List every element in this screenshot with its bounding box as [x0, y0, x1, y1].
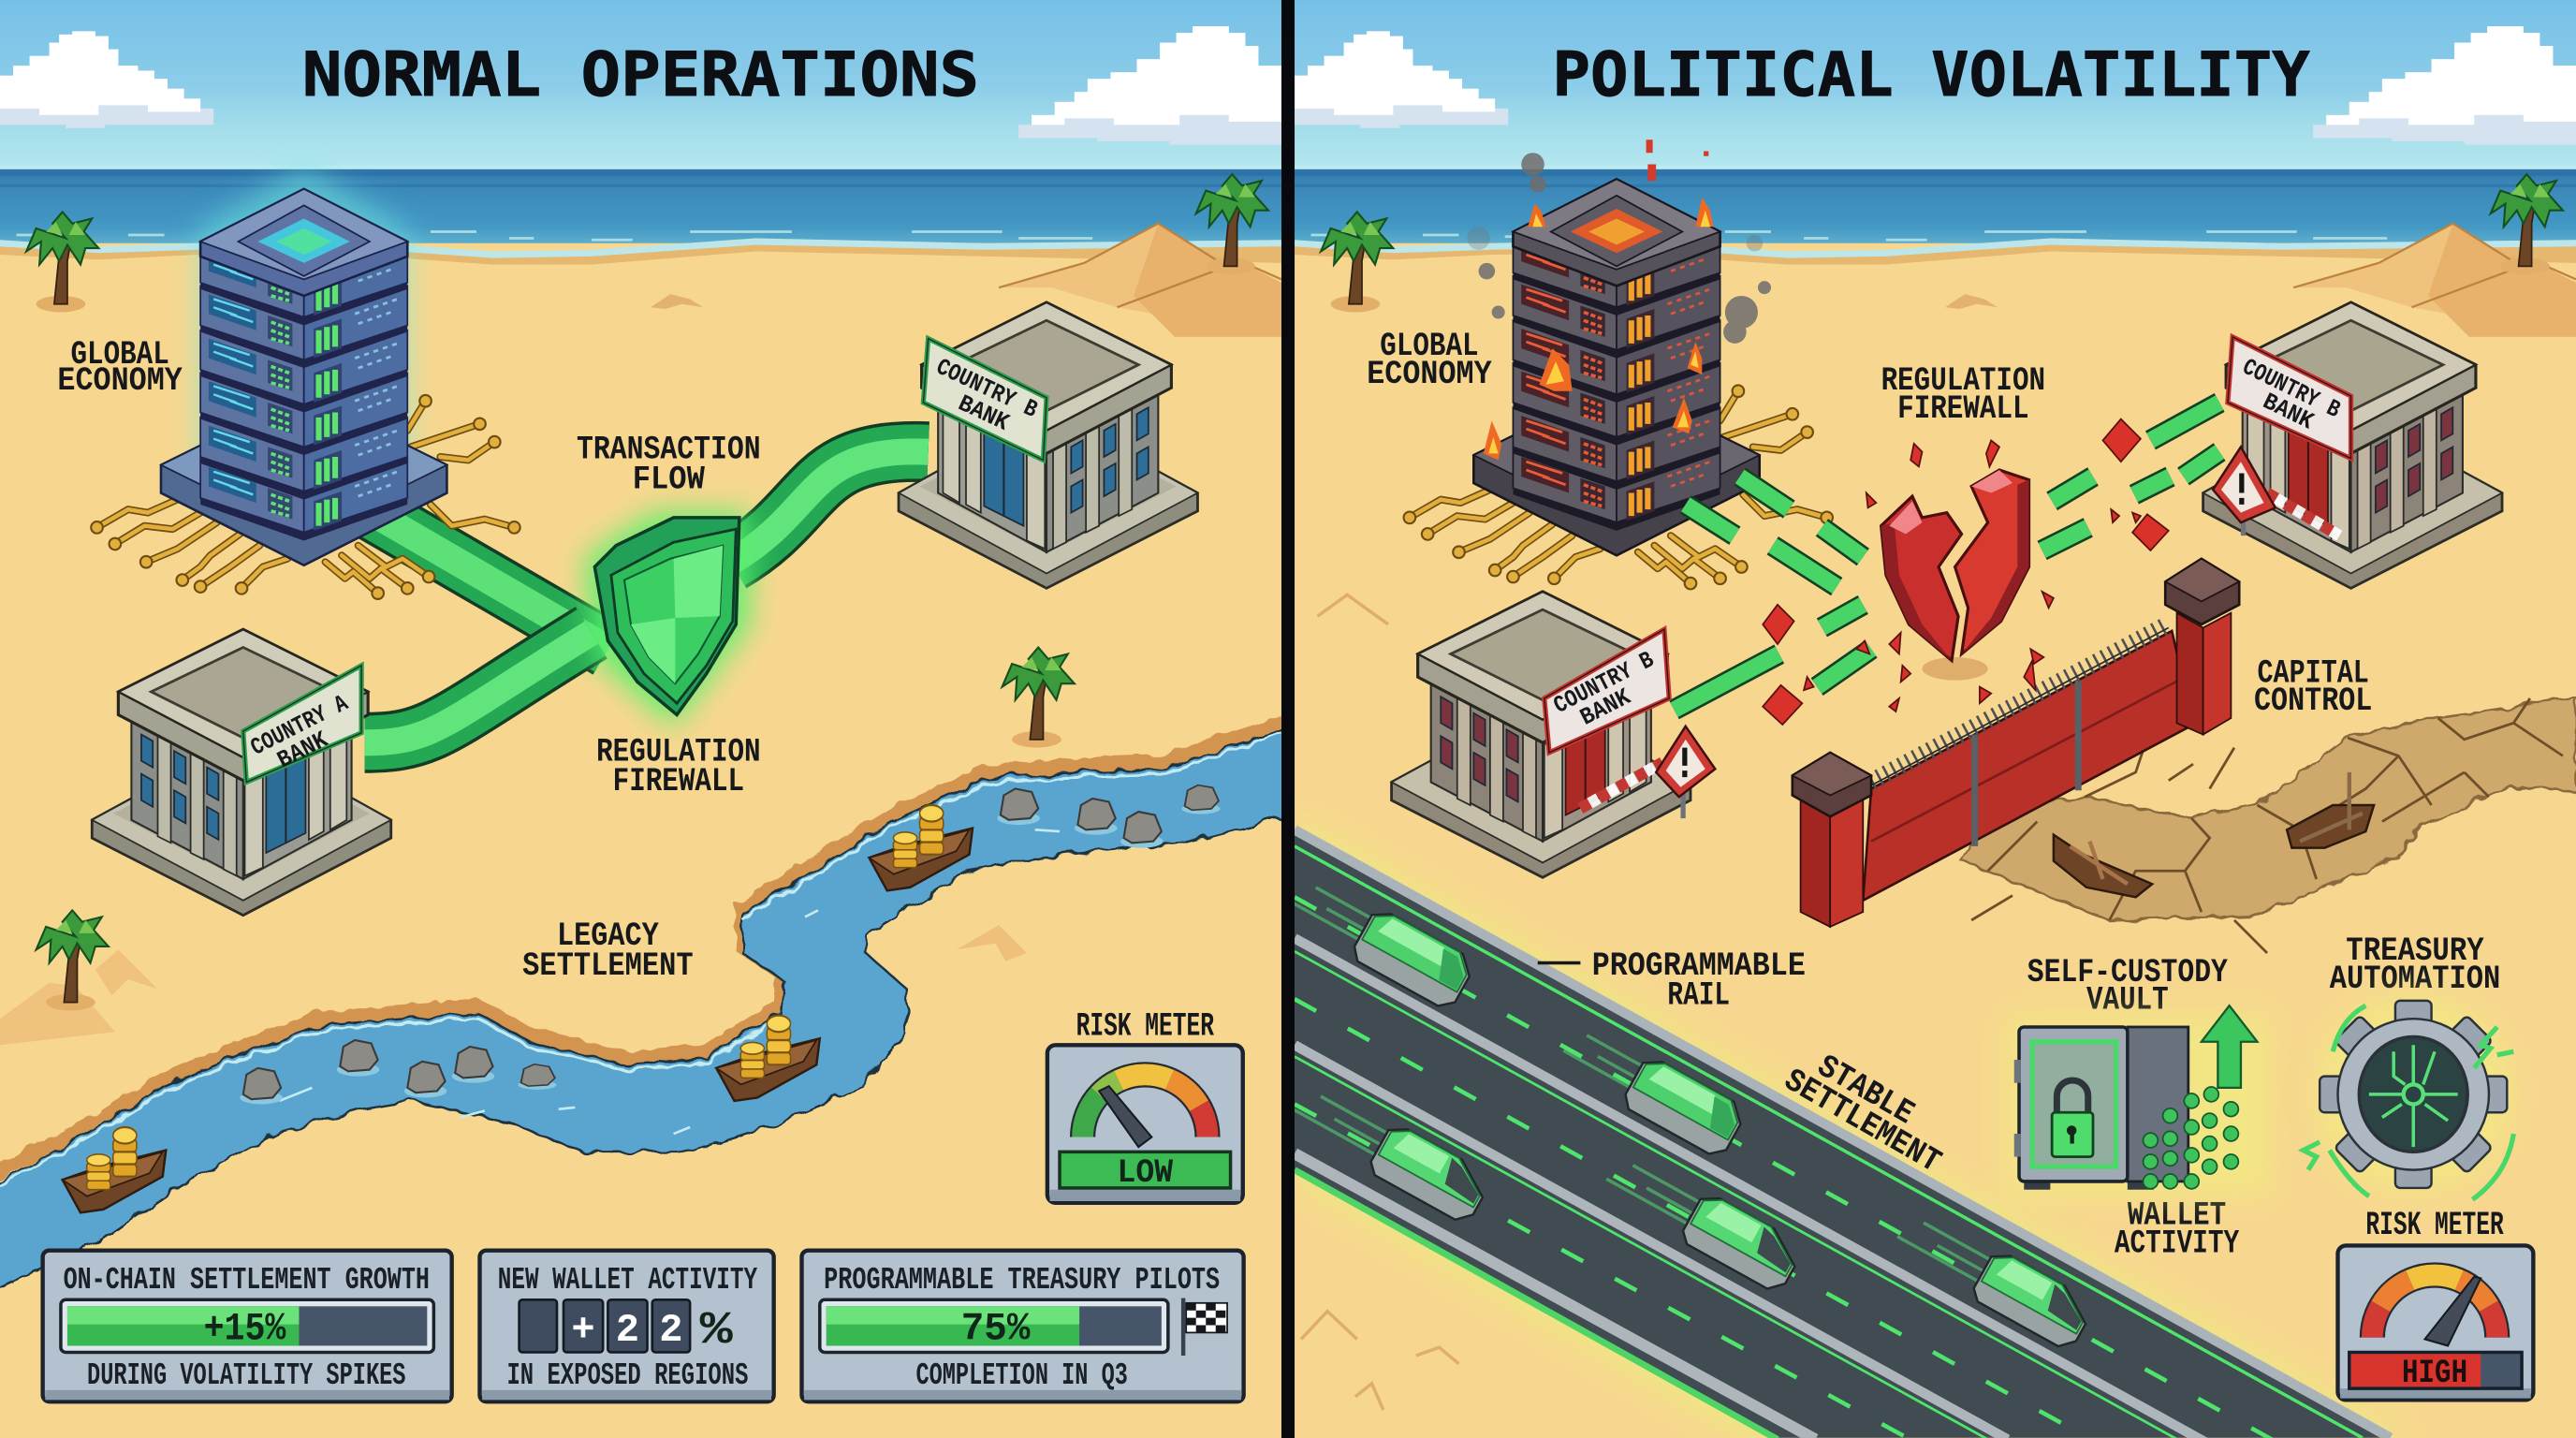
title: normal operations: NORMAL OPERATIONS [302, 40, 979, 110]
label: global economy: ECONOMY [1367, 356, 1492, 393]
label: regulation firewall [1881, 362, 2045, 428]
label: global economy: GLOBAL [1380, 328, 1479, 365]
icon: country a bank: BANK [273, 726, 333, 774]
label: regulation firewall [598, 738, 759, 790]
panel: political volatility [1282, 40, 2576, 1438]
icon: global economy server tower [91, 168, 520, 599]
panel divider [1281, 0, 1295, 1438]
broken transaction flow pipes [1674, 403, 2219, 710]
label: self-custody vault: VAULT [2086, 982, 2169, 1020]
label: programmable rail: PROGRAMMABLE [1592, 947, 1806, 985]
label: legacy settlement: SETTLEMENT [522, 947, 694, 985]
label: capital control [2254, 654, 2372, 720]
icon: country a bank [92, 629, 391, 916]
capital control wall [1793, 559, 2239, 927]
stat panel: programmable treasury pilots: 75% [961, 1306, 1031, 1351]
icon: country b bank, lower: BANK [1576, 683, 1635, 732]
icon: burning server tower [1404, 139, 1833, 589]
stat panel: on-chain settlement growth: ON-CHAIN SETTLEMENT GROWTH [64, 1263, 430, 1299]
label: regulation firewall: REGULATION [596, 734, 761, 771]
label: stable settlement: SETTLEMENT [1778, 1062, 1947, 1181]
label: regulation firewall: FIREWALL [613, 763, 744, 800]
label: programmable rail: RAIL [1667, 976, 1730, 1014]
stat panel: new wallet activity: IN EXPOSED REGIONS [506, 1358, 748, 1394]
warning sign and barrier [2213, 447, 2339, 536]
label: transaction flow: FLOW [633, 461, 706, 498]
label: global economy: ECONOMY [57, 362, 183, 400]
stat panel: new wallet activity: 2 [659, 1308, 683, 1353]
red shards [1763, 419, 2169, 725]
label: transaction flow [577, 436, 759, 489]
label: capital control: CAPITAL [2258, 654, 2369, 692]
icon: country a bank: COUNTRY A [246, 690, 353, 762]
label: programmable rail [1538, 947, 1806, 1014]
icon: country b bank, lower: COUNTRY B [1549, 646, 1659, 720]
title: political volatility: POLITICAL VOLATILITY [1553, 40, 2310, 110]
stat panel: new wallet activity: 2 [616, 1308, 639, 1353]
icon: country b bank, lower [1392, 592, 1715, 877]
risk meter: low: RISK METER [1076, 1008, 1215, 1046]
label: wallet activity: ACTIVITY [2115, 1225, 2239, 1262]
highway: programmable rail [1282, 816, 2415, 1438]
legacy settlement river with rocks and boats [0, 722, 1290, 1292]
label: transaction flow: TRANSACTION [577, 432, 761, 469]
icon: country b bank: BANK [954, 390, 1014, 437]
label: legacy settlement: LEGACY [557, 917, 659, 955]
stat panel: on-chain settlement growth [43, 1251, 452, 1401]
icon: country b bank, upper: BANK [2259, 389, 2318, 436]
label: regulation firewall: REGULATION [1881, 362, 2045, 400]
label: wallet activity [2115, 1197, 2239, 1262]
stat panel: new wallet activity: % [700, 1304, 733, 1357]
stat panel: on-chain settlement growth: +15% [204, 1306, 286, 1351]
icon: self-custody vault [2008, 1016, 2271, 1196]
panel background: political volatility sky, sea and beach [1295, 0, 2576, 1438]
warning sign and barrier [1580, 726, 1715, 818]
transaction flow pipes [361, 451, 929, 742]
icon: treasury automation gear [2304, 996, 2513, 1199]
stat panel: new wallet activity: NEW WALLET ACTIVITY [498, 1263, 757, 1299]
stat panel: programmable treasury pilots [801, 1251, 1244, 1401]
stat panel: new wallet activity: + [571, 1308, 595, 1353]
label: wallet activity: WALLET [2128, 1197, 2226, 1235]
label: treasury automation [2330, 932, 2500, 998]
label: regulation firewall: FIREWALL [1897, 390, 2029, 428]
icon: country b bank [899, 302, 1197, 588]
label: treasury automation: AUTOMATION [2330, 961, 2500, 998]
label: global economy [60, 341, 183, 389]
stat panel: new wallet activity [479, 1251, 774, 1401]
fires and smoke [1467, 139, 1771, 460]
stat panel: programmable treasury pilots: PROGRAMMABLE TREASURY PILOTS [824, 1263, 1220, 1299]
icon: country b bank: COUNTRY B [931, 354, 1042, 424]
label: stable settlement: STABLE [1810, 1048, 1921, 1133]
risk meter: high [2338, 1207, 2533, 1400]
panel background: normal operations sky, sea and beach [0, 0, 1281, 1438]
risk meter: high: HIGH [2402, 1355, 2467, 1392]
stat panel: on-chain settlement growth: DURING VOLATILITY SPIKES [87, 1358, 406, 1394]
label: self-custody vault [2027, 954, 2228, 1020]
dry cracked riverbed with wrecked boats [1962, 698, 2576, 953]
risk meter: high: RISK METER [2365, 1207, 2504, 1244]
palm trees and dune, lower beach [0, 648, 1075, 1045]
icon: wallet activity arrow and dots [2144, 1005, 2258, 1189]
label: self-custody vault: SELF-CUSTODY [2027, 954, 2228, 991]
panel: normal operations [0, 40, 1290, 1401]
icon: broken regulation firewall shield [1763, 419, 2169, 725]
sand marks [1301, 594, 1459, 1410]
label: global economy: GLOBAL [70, 336, 169, 374]
icon: checkered flag [1181, 1299, 1227, 1356]
label: capital control: CONTROL [2254, 682, 2372, 720]
risk meter: low: LOW [1117, 1154, 1174, 1192]
icon: country b bank, upper [2203, 302, 2502, 588]
risk meter: low [1047, 1008, 1243, 1203]
label: legacy settlement [522, 922, 693, 976]
label: treasury automation: TREASURY [2346, 932, 2484, 970]
stat panel: programmable treasury pilots: COMPLETION IN Q3 [915, 1358, 1128, 1394]
icon: regulation firewall shield [585, 513, 749, 726]
icon: country b bank, upper: COUNTRY B [2238, 354, 2345, 424]
label: global economy [1367, 328, 1492, 393]
